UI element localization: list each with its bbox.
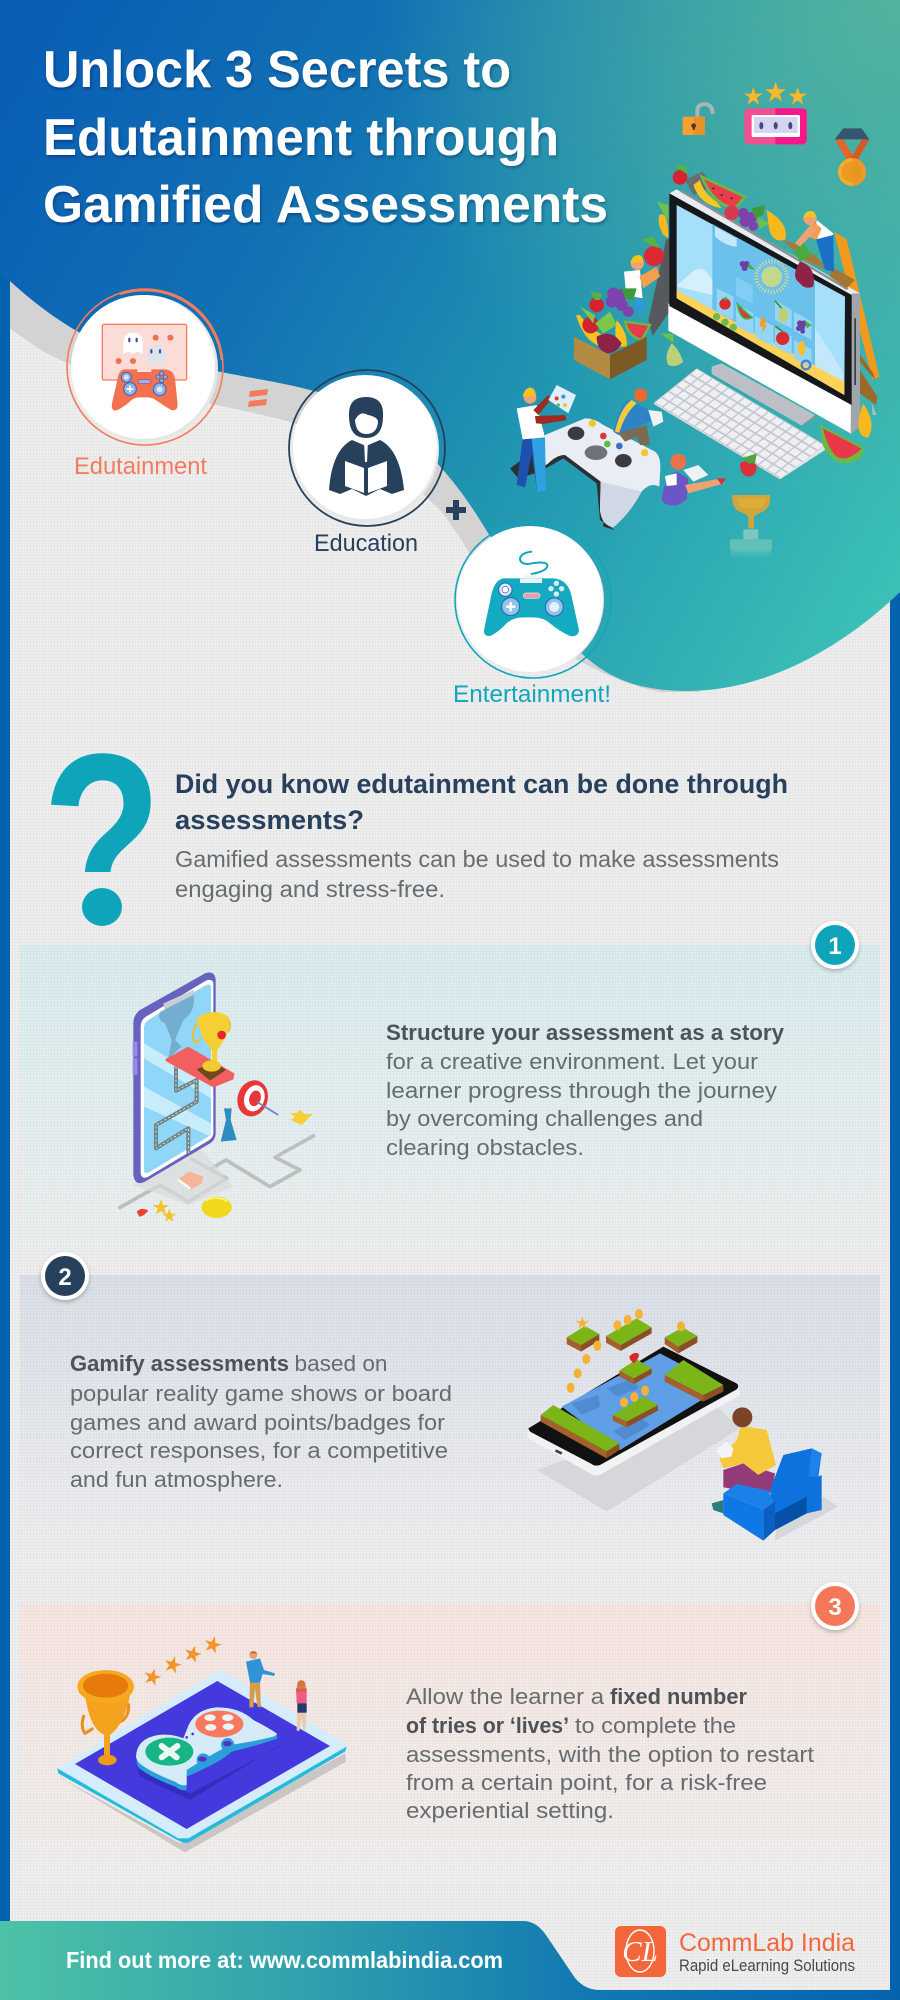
armchair floor shadow [775, 1497, 838, 1541]
equals sign [248, 389, 268, 407]
step 3 text [406, 1684, 815, 1823]
step 3 text: experiential setting. [406, 1798, 614, 1823]
tablet [57, 1672, 347, 1843]
footer call to action: Find out more at: www.commlabindia.com [66, 1947, 503, 1973]
step 3 text: from a certain point, for a risk-free [406, 1770, 767, 1795]
blue armchair [723, 1448, 822, 1541]
gold trophy [193, 1012, 230, 1081]
phone body [527, 1347, 740, 1476]
fruit crate [574, 202, 668, 379]
illustration: tablet with controller, trophy and stars [57, 1634, 347, 1852]
floor path [118, 1135, 315, 1208]
label: Education: Education [314, 530, 418, 557]
logo tagline: Rapid eLearning Solutions [679, 1956, 855, 1975]
did you know heading: assessments? [175, 805, 364, 835]
did you know description: Gamified assessments can be used to make assessments [175, 846, 779, 872]
rating stars [142, 1634, 223, 1687]
panel: step 1 background [20, 945, 880, 1260]
player with tablet [517, 385, 576, 493]
formula node: entertainment [453, 522, 611, 708]
woman standing on tablet [296, 1680, 307, 1731]
icon: three stars score board [744, 82, 807, 144]
icon: arcade screen and orange controller [102, 324, 187, 411]
did you know heading: Did you know edutainment can be done through [175, 769, 788, 799]
monitor stand [712, 363, 815, 426]
phone shadow [537, 1407, 740, 1512]
fruit pile along the top of the monitor [673, 165, 855, 288]
small floating platforms [567, 1318, 697, 1427]
title: Unlock 3 Secrets to [43, 41, 511, 99]
number badge 1: 1 [828, 933, 842, 960]
thumbs up [177, 1172, 203, 1190]
large green platforms [541, 1360, 723, 1458]
logo wordmark: CommLab India [679, 1929, 855, 1957]
did you know description [175, 846, 779, 902]
did you know heading [175, 769, 788, 835]
plus sign [446, 500, 466, 520]
header gradient shape [0, 0, 900, 691]
seated player [712, 1407, 776, 1513]
step 2 text: based on [294, 1351, 388, 1376]
left ladder [648, 237, 671, 336]
faded trophy [730, 495, 772, 559]
man standing on tablet [246, 1651, 275, 1707]
tablet shadow [58, 1753, 346, 1852]
logo mark: CL [622, 1936, 658, 1968]
number badge 3 [811, 1582, 859, 1630]
red platform [165, 1047, 234, 1087]
formula node: edutainment [67, 289, 223, 480]
grey ribbon behind the formula [0, 270, 700, 692]
step 3 text: of tries or ‘lives’ [406, 1713, 569, 1738]
monitor [668, 189, 860, 435]
node circle with ring [455, 522, 611, 678]
illustration: player on sofa with platform game on giant phone [527, 1309, 838, 1541]
game controller [510, 418, 660, 530]
number badge 1 [811, 921, 859, 969]
icon: open padlock [683, 104, 713, 135]
lemon at monitor edge [858, 403, 872, 437]
step 1 text: Structure your assessment as a story [386, 1020, 784, 1045]
step 1 text: for a creative environment. Let your [386, 1049, 759, 1074]
icon: large question mark: ? [42, 703, 162, 978]
logo: CommLab India [615, 1926, 855, 1977]
footer bar [0, 1921, 900, 2000]
number badge 2 [41, 1252, 89, 1300]
icon: large question mark [51, 753, 151, 926]
on-screen game tiles and sun [713, 261, 843, 382]
orange trophy [77, 1670, 134, 1765]
step 3 text: Allow the learner a [406, 1684, 605, 1709]
step 2 text: and fun atmosphere. [70, 1467, 283, 1492]
controller on tablet [136, 1707, 277, 1790]
node circle with ring [67, 289, 223, 445]
step 2 text: correct responses, for a competitive [70, 1438, 448, 1463]
apple on the floor [740, 453, 757, 477]
label: Edutainment: Edutainment [74, 453, 207, 480]
yellow star [290, 1109, 313, 1125]
target with arrow [233, 1076, 278, 1120]
formula node: education [289, 370, 445, 557]
panel: step 3 background [20, 1604, 880, 1884]
number badge 3: 3 [828, 1594, 842, 1621]
icon: teal controller [484, 552, 579, 636]
keyboard [654, 368, 825, 479]
step 2 text: games and award points/badges for [70, 1410, 446, 1435]
worker on top of monitor [795, 211, 834, 272]
panel: step 2 background [20, 1275, 880, 1570]
right orange ladder [834, 232, 879, 415]
player kneeling [613, 388, 663, 445]
step 1 text: by overcoming challenges and [386, 1106, 703, 1131]
watermelon slice [821, 427, 863, 463]
icon: medal [835, 128, 869, 186]
node circle with ring [289, 370, 445, 526]
step 1 text: clearing obstacles. [386, 1135, 584, 1160]
ghost trophy on screen [159, 995, 194, 1058]
step 3 text: to complete the [575, 1713, 736, 1738]
number badge 2: 2 [58, 1264, 72, 1291]
step 3 text: assessments, with the option to restart [406, 1742, 815, 1767]
road on screen [156, 1067, 197, 1153]
title: Edutainment through [43, 109, 559, 167]
step 1 text: learner progress through the journey [386, 1078, 778, 1103]
hero illustration: monitor, keyboard, controller and players [510, 82, 879, 559]
logo mark [615, 1926, 666, 1977]
step 3 text: fixed number [610, 1684, 747, 1709]
player sitting on the floor [662, 454, 726, 506]
worker climbing the left ladder with apple [624, 237, 664, 313]
step 2 text [70, 1351, 452, 1492]
phone body [133, 972, 216, 1183]
title: Gamified Assessments [43, 176, 608, 234]
coins, heart and small stars [137, 1197, 232, 1222]
pear [661, 333, 683, 366]
label: Entertainment!: Entertainment! [453, 681, 611, 708]
icon: person reading a book [329, 397, 404, 496]
blue game pawn [221, 1108, 237, 1142]
step 2 text: Gamify assessments [70, 1351, 289, 1376]
did you know description: engaging and stress-free. [175, 876, 445, 902]
coins, star and heart [567, 1309, 685, 1407]
step 2 text: popular reality game shows or board [70, 1381, 452, 1406]
step 1 text [386, 1020, 784, 1160]
title [43, 41, 608, 234]
illustration: phone with trophy and board-game path [118, 972, 315, 1222]
